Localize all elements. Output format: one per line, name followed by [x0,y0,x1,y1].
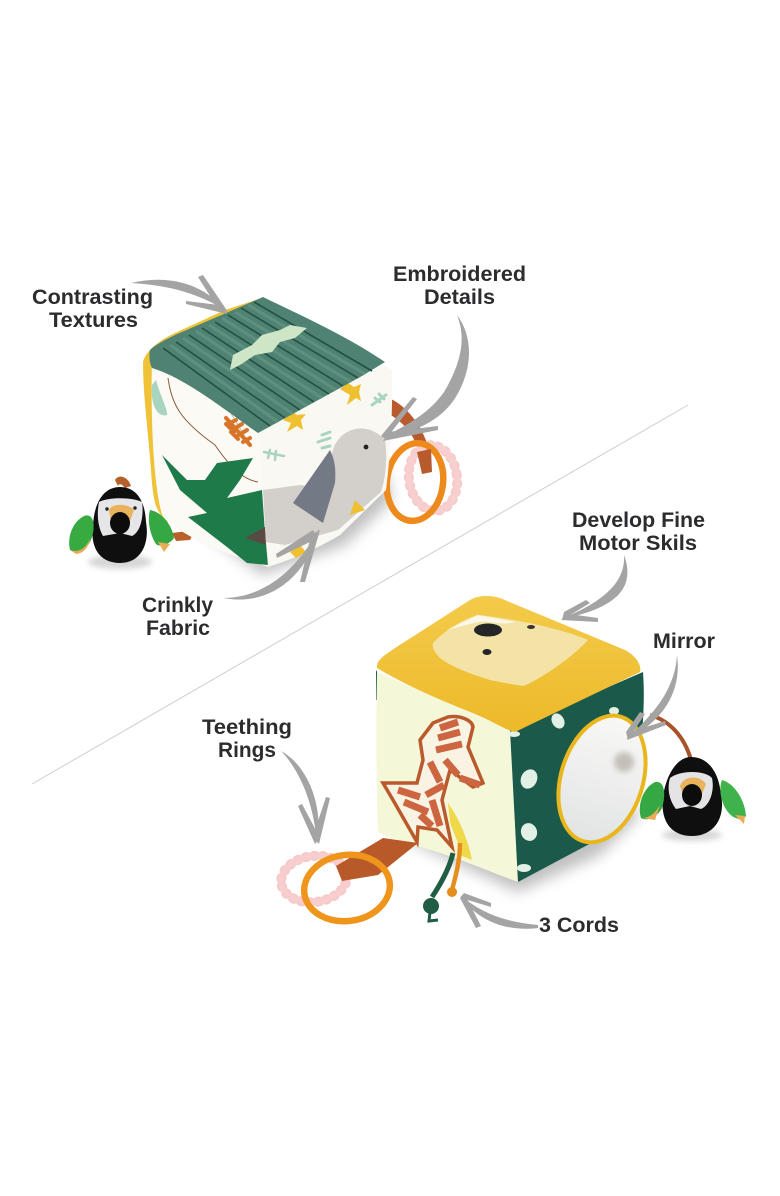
label: Mirror: Mirror [653,630,715,653]
right face [258,365,392,567]
bear face panel [433,615,588,686]
strap to toucan [172,530,195,541]
label: 3 Cords: 3 Cords [539,914,619,937]
arrow: teething rings [281,751,330,844]
divider line [32,405,688,784]
cords and tag [423,803,472,921]
arrow: mirror [626,655,678,740]
toucan ground shadow [88,555,152,569]
label: Develop Fine Motor Skils [572,509,705,555]
corduroy top [149,297,385,433]
product: upper cube with toucan and rings [69,297,461,575]
left face [152,358,268,567]
arrow: develop fine motor skills [561,555,627,622]
arrow: embroidered details [381,315,469,441]
mirror [544,705,660,853]
label: Develop Fine Motor Skils: Develop Fine [572,509,705,532]
toucan [69,477,174,563]
label: Embroidered Details: Details [424,286,495,309]
ground shadow [170,470,392,575]
teething rings and strap [278,838,418,927]
white leaf prints [508,707,619,872]
right face [510,672,644,882]
toucan strap [650,715,691,760]
label: Embroidered Details [393,263,526,309]
teething rings and strap [382,398,461,525]
plush yellow top [377,596,640,732]
arrow: 3 cords [460,893,538,929]
label: Develop Fine Motor Skils: Motor Skils [579,532,697,555]
toucan ground shadow [662,829,722,841]
left edge sliver [376,670,379,700]
right face print: elephant [263,383,386,558]
label: Contrasting Textures: Textures [49,309,138,332]
toucan [640,757,746,836]
left face [376,672,518,882]
yellow back panel [143,298,262,522]
giraffe patch [383,717,483,847]
arrow: contrasting textures [131,275,228,314]
label: Crinkly Fabric: Fabric [146,617,210,640]
label: Embroidered Details: Embroidered [393,263,526,286]
label: Crinkly Fabric: Crinkly [142,594,213,617]
ground shadow [395,790,640,892]
arrow: crinkly fabric [223,529,320,600]
label: Teething Rings: Teething [202,716,292,739]
leaf patch on top [230,325,307,370]
label: Contrasting Textures [32,286,153,332]
label: Crinkly Fabric [142,594,213,640]
left face print [152,378,268,565]
product: lower cube with toucan and rings [278,596,746,927]
label: Teething Rings: Rings [218,739,276,762]
label: Contrasting Textures: Contrasting [32,286,153,309]
label: Teething Rings [202,716,292,762]
